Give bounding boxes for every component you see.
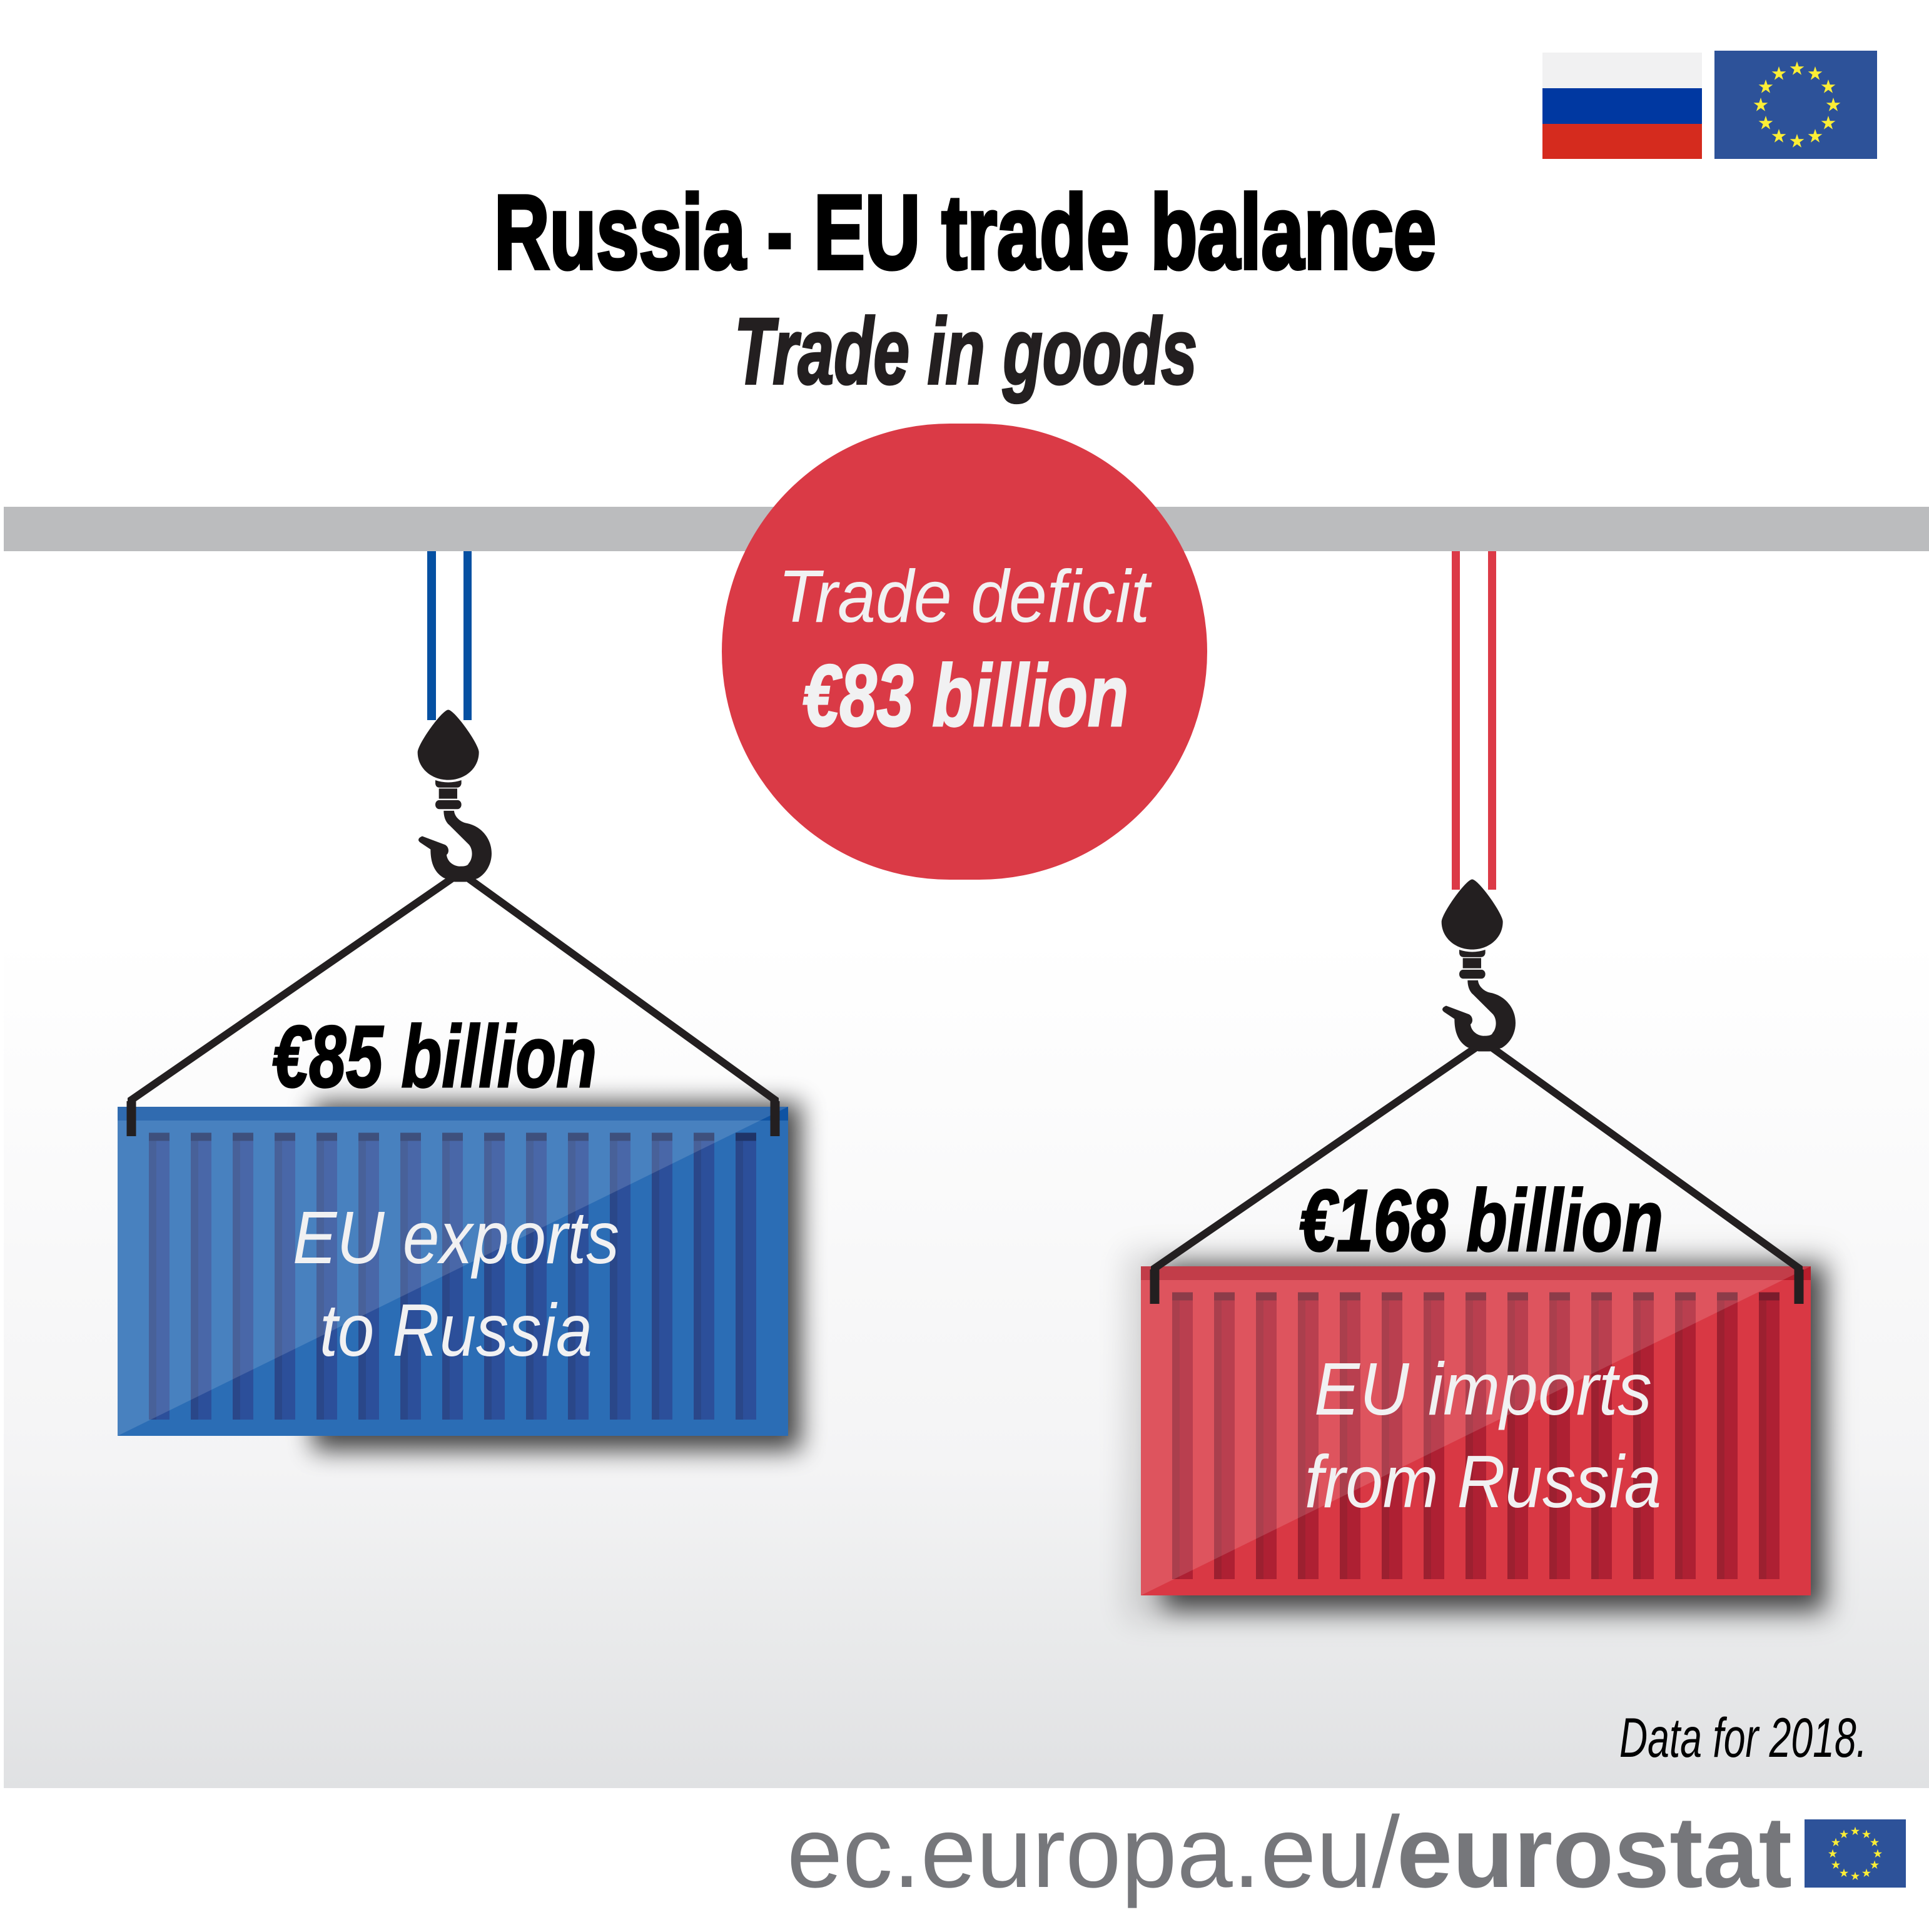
container shadow — [1126, 1251, 1833, 1620]
footer — [4, 1788, 1929, 1932]
icon: footer EU flag — [1805, 1819, 1906, 1888]
container label: EU exports — [293, 1196, 619, 1279]
slings: imports — [1155, 1045, 1799, 1304]
footer url: ec.europa.eu/ — [787, 1796, 1400, 1909]
container: EU exports — [118, 1102, 801, 1450]
flag: European Union — [1714, 51, 1877, 159]
container: EU imports — [1126, 1251, 1833, 1620]
container: EU exports: to Russia — [320, 1289, 592, 1372]
callout label: Trade deficit — [778, 555, 1153, 638]
callout value: €83 billion — [802, 646, 1128, 745]
title: Russia - EU trade balance — [494, 173, 1436, 291]
subtitle: Trade in goods — [734, 298, 1197, 404]
callout: trade deficit — [722, 424, 1207, 880]
crane cables: exports — [427, 551, 472, 720]
crane cables: imports — [1452, 551, 1496, 890]
container: EU imports: from Russia — [1305, 1440, 1661, 1523]
background gradient — [4, 938, 1929, 1788]
slings: exports — [131, 875, 775, 1136]
icon: crane hook, exports — [418, 710, 492, 882]
footer brand: eurostat — [1397, 1796, 1792, 1909]
value: EU exports: €85 billion — [272, 1007, 597, 1106]
crane beam — [4, 507, 1929, 551]
container shadow — [313, 1102, 801, 1450]
container label: EU imports — [1314, 1348, 1652, 1431]
value: EU imports: €168 billion — [1299, 1171, 1663, 1269]
icon: crane hook, imports — [1442, 880, 1516, 1051]
flag: Russia — [1542, 53, 1702, 159]
